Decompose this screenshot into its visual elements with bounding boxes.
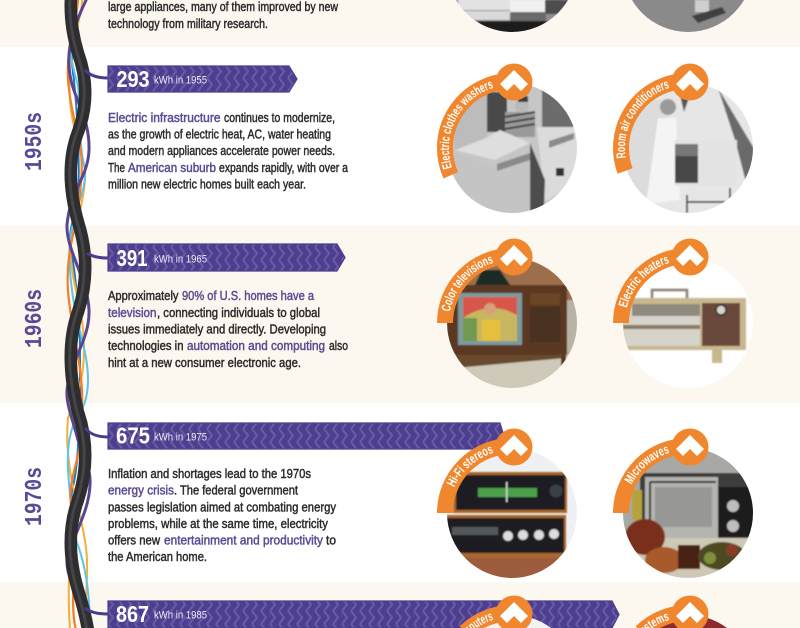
- label ribbon: Electric clothes washers: [437, 64, 532, 178]
- text block: 1970s description: entertainment and productivity: [164, 534, 324, 548]
- stat banner: 293 kWh: kWh in 1955: [154, 74, 207, 86]
- section: 1950s: [22, 64, 753, 213]
- photo: vacuum cleaner: [632, 0, 744, 32]
- text block: 1940s description: large appliances, many of them improved by new: [108, 0, 339, 14]
- stat banner: 391 kWh: 391: [116, 245, 148, 271]
- decade label: 1960s: [22, 289, 49, 348]
- text block: 1970s description: offers new: [108, 534, 161, 548]
- photo: electric heater: [620, 258, 753, 388]
- text block: 1970s description: energy crisis: [108, 484, 174, 498]
- section: 1940s tail: [108, 0, 744, 32]
- text block: 1960s description: 90% of U.S. homes have a: [182, 289, 314, 303]
- text block: 1970s description: to: [326, 534, 336, 548]
- connector wire: [87, 253, 108, 258]
- label ribbon: Microwaves: [613, 428, 708, 513]
- label ribbon: Microwaves: Microwaves: [624, 446, 669, 484]
- connector wire: [85, 70, 108, 78]
- connector wire: [85, 428, 108, 437]
- photo: color television: [447, 261, 577, 388]
- text block: 1960s description: technologies in: [108, 339, 184, 353]
- stat banner: 867 kWh: kWh in 1985: [154, 610, 207, 622]
- decade label: 1970s: [22, 467, 49, 526]
- stat banner: 293 kWh: [108, 66, 297, 92]
- text block: 1960s description: also: [329, 339, 348, 353]
- label ribbon: Electric heaters: [613, 238, 708, 323]
- section: 1960s: [22, 238, 753, 388]
- text block: 1970s description: . The federal government: [174, 484, 298, 498]
- stat banner: 675 kWh: [108, 422, 504, 449]
- text block: 1950s description: and modern appliances accelerate power needs.: [108, 144, 335, 158]
- label ribbon: Color televisions: [437, 238, 532, 323]
- decade label: 1950s: [22, 112, 49, 171]
- stat banner: 867 kWh: 867: [116, 601, 149, 627]
- text block: 1970s description: Inflation and shortages lead to the 1970s: [108, 467, 311, 481]
- text block: 1950s description: Electric infrastructure: [108, 111, 220, 125]
- photo: microwave oven: [623, 451, 753, 578]
- text block: 1950s description: American suburb: [128, 161, 216, 175]
- label ribbon: Room air conditioners: [613, 64, 708, 174]
- stat banner: 867 kWh: [108, 601, 619, 628]
- stat banner: 675 kWh: 675: [116, 422, 150, 448]
- twisted electric wires timeline: [67, 0, 92, 628]
- text block: 1950s description: [108, 111, 348, 192]
- photo: appliance washer: [456, 0, 568, 32]
- label ribbon: systems: [636, 596, 708, 628]
- text block: 1950s description: The: [108, 161, 125, 175]
- label ribbon: Electric clothes washers: Electric clothes washers: [440, 82, 493, 170]
- stat banner: 293 kWh: 293: [116, 66, 150, 92]
- stat banner: 391 kWh: kWh in 1965: [154, 254, 207, 266]
- text block: 1950s description: as the growth of electric heat, AC, water heating: [108, 128, 331, 142]
- label ribbon: Room air conditioners: Room air conditioners: [616, 82, 669, 158]
- text block: 1940s description: [108, 0, 339, 31]
- photo: hi-fi stereo: [447, 452, 577, 578]
- text block: 1970s description: passes legislation aimed at combating energy: [108, 500, 337, 514]
- text block: 1950s description: continues to modernize,: [224, 111, 335, 125]
- connector wire: [85, 608, 108, 614]
- text block: 1970s description: the American home.: [108, 550, 207, 564]
- text block: 1950s description: expands rapidly, with over a: [219, 161, 348, 175]
- stat banner: 675 kWh: kWh in 1975: [154, 432, 207, 444]
- text block: 1960s description: hint at a new consumer electronic age.: [108, 356, 301, 370]
- text block: 1970s description: problems, while at the same time, electricity: [108, 517, 329, 531]
- section: 1970s: [22, 422, 753, 578]
- label ribbon: Hi-Fi stereos: [437, 428, 532, 513]
- text block: 1960s description: Approximately: [108, 289, 179, 303]
- label ribbon: Electric heaters: Electric heaters: [618, 256, 669, 308]
- photo: systems appliance: [644, 615, 732, 628]
- text block: 1960s description: [108, 289, 348, 370]
- text block: 1960s description: automation and computing: [187, 339, 325, 353]
- label ribbon: Hi-Fi stereos: Hi-Fi stereos: [446, 446, 493, 487]
- text block: 1940s description: technology from military research.: [108, 17, 268, 31]
- text block: 1950s description: million new electric homes built each year.: [108, 178, 306, 192]
- text block: 1960s description: , connecting individuals to global: [157, 306, 320, 320]
- text block: 1960s description: television: [108, 306, 156, 320]
- stat banner: 391 kWh: [108, 244, 345, 271]
- section: 1980s: [84, 596, 727, 628]
- label ribbon: computers: [460, 596, 532, 628]
- photo: room air conditioners: [627, 86, 753, 213]
- label ribbon: Color televisions: Color televisions: [442, 256, 493, 311]
- text block: 1960s description: issues immediately and directly. Developing: [108, 322, 326, 336]
- text block: 1970s description: [108, 467, 337, 564]
- photo: computer: [468, 615, 556, 628]
- photo: electric clothes washers: [452, 86, 577, 213]
